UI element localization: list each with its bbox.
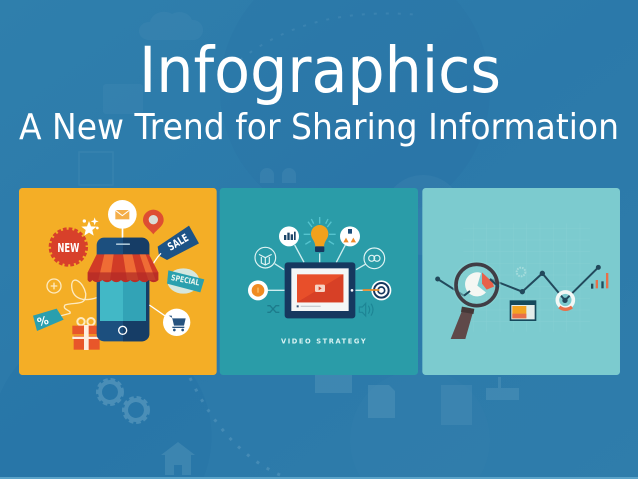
icon: coin xyxy=(248,280,268,300)
badge: special xyxy=(167,268,204,294)
icon: shuffle xyxy=(267,306,279,312)
icon: document xyxy=(368,385,395,418)
tablet xyxy=(285,262,355,318)
panel: video strategy xyxy=(220,188,418,375)
icon: light bulb xyxy=(304,217,336,252)
icon: stars xyxy=(81,217,99,236)
badge: new: NEW xyxy=(57,240,79,255)
tag: percent xyxy=(33,309,64,331)
badge: special: SPECIAL xyxy=(170,273,200,287)
title: Infographics xyxy=(139,34,501,107)
icon: brain xyxy=(364,248,385,269)
connector to cart xyxy=(149,305,167,317)
tag: percent: % xyxy=(35,313,50,329)
icon: mini bars xyxy=(591,273,608,289)
icon: target xyxy=(363,280,391,300)
icon: wifi box xyxy=(486,377,519,400)
icon: printer xyxy=(103,84,143,114)
tag: sale xyxy=(148,226,199,273)
shop awning xyxy=(88,254,158,282)
icon: factory chart xyxy=(279,226,299,246)
icon: open box xyxy=(255,247,276,268)
label: video strategy: VIDEO STRATEGY xyxy=(281,338,366,346)
trend line xyxy=(435,265,601,300)
icon: cloud xyxy=(139,12,203,40)
faint background icons xyxy=(79,12,519,475)
tag: sale: SALE xyxy=(165,231,191,254)
icon: envelope xyxy=(108,200,137,240)
badge: new xyxy=(50,229,86,265)
icon: browser chart xyxy=(510,300,536,321)
panel: mobile shop xyxy=(19,188,217,375)
faint grid xyxy=(463,223,590,332)
icon: cart xyxy=(163,309,190,336)
icon: map card xyxy=(79,152,113,185)
phone xyxy=(97,238,149,341)
icon: gauge xyxy=(557,292,573,309)
icon: envelope xyxy=(315,373,352,393)
connector lines xyxy=(268,245,372,290)
string line xyxy=(55,280,97,317)
icon: faint gear xyxy=(517,268,525,276)
icon: people xyxy=(260,168,296,183)
icon: contact card xyxy=(441,385,472,425)
icon: speaker xyxy=(359,303,373,316)
icon: plus circle xyxy=(47,279,61,293)
magnifying glass xyxy=(451,261,501,339)
icon: location pin xyxy=(143,210,164,234)
panel: analytics xyxy=(422,188,620,375)
icon: gears xyxy=(99,381,147,421)
icon: people hierarchy xyxy=(340,226,360,246)
icon: house xyxy=(161,442,195,475)
icon: gift box xyxy=(72,318,101,350)
